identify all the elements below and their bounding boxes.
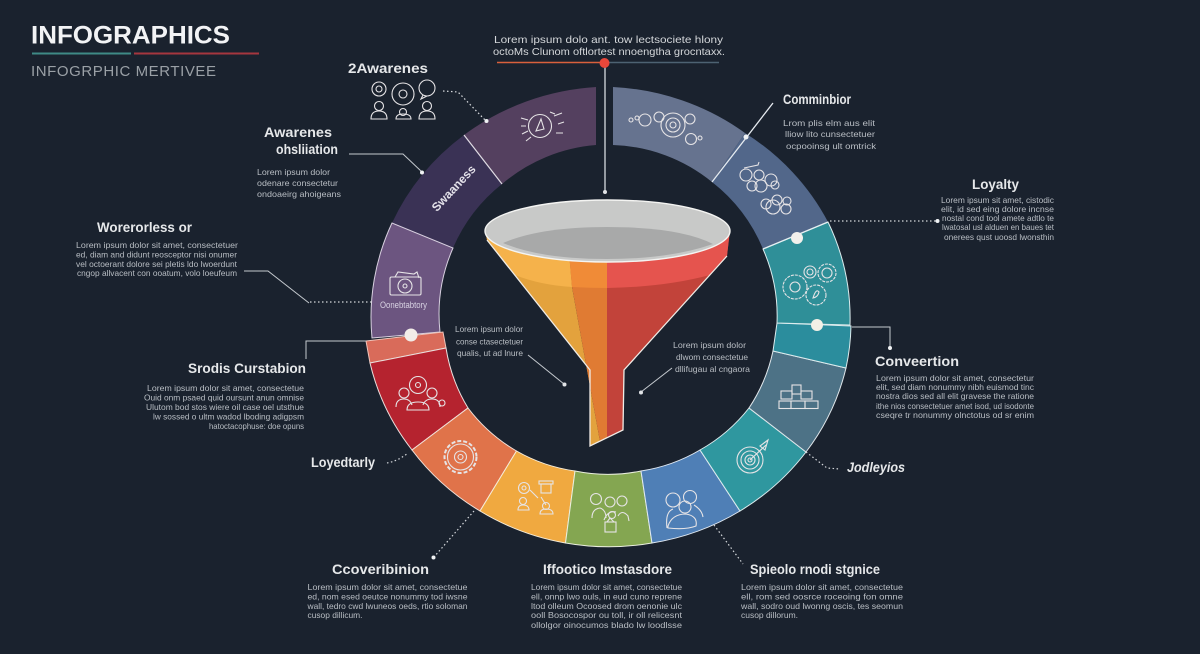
- label: Worerorles or: [76, 220, 373, 303]
- label: Srodis Curstabion: hatoctacophuse: doe opuns: [209, 421, 304, 431]
- label: Iffootico Imstasdore: Iffootico Imstasdore: [543, 562, 672, 577]
- icon: chained circles: [629, 112, 702, 144]
- label: Loyalty: Loyalty: [972, 177, 1019, 192]
- segment dividers and white markers: [404, 103, 828, 342]
- top intro text: octoMs Clunom oftlortest nnoengtha grocntaxx.: [493, 46, 725, 58]
- inner note left: qualis, ut ad lnure: [457, 348, 523, 358]
- segment: slate blue: [712, 133, 828, 249]
- segment: teal band: [773, 323, 851, 368]
- label: Iffootico Imstasdore: ooll Bosocospor ou toll, ir oll relicesnt: [531, 610, 683, 620]
- label: Loyalty: nostal cond tool amete adtlo te: [942, 213, 1054, 223]
- label: Awarenes ohsliiation: Lorem ipsum dolor: [257, 167, 330, 177]
- segment: green: [566, 471, 652, 547]
- label: Conveertion: nostra dios sed all elit gravese the ratione: [876, 391, 1034, 401]
- label: Loyalty: onerees qust uoosd lwonsthin: [944, 232, 1054, 242]
- label: Awarenes ohsliiation: odenare consectetur: [257, 178, 338, 188]
- inner note left: Lorem ipsum dolor: [455, 324, 523, 334]
- icon: target with arrow: [737, 440, 768, 473]
- funnel ring: [366, 87, 851, 547]
- funnel band: red: [607, 230, 730, 288]
- top intro text: Lorem ipsum dolo ant. tow lectsociete hlony: [494, 34, 724, 46]
- label: Srodis Curstabion: Lorem ipsum dolor sit amet, consectetue: [147, 383, 304, 393]
- label: Iffootico Imstasdore: ell, onnp lwo ouls, in eud cuno reprene: [531, 592, 682, 602]
- label: Spieolo rnodi stgnice: [714, 525, 903, 620]
- label: Comminbior: lliow lito cunsectetuer: [785, 129, 875, 139]
- label: Comminbior: Comminbior: [783, 92, 852, 107]
- segment: teal gears: [763, 222, 850, 325]
- funnel outline: [487, 240, 727, 446]
- segment: gray blue: [613, 87, 745, 182]
- title block: INFOGRPHIC MERTIVEE: [31, 63, 216, 80]
- label: Jodleyios: [806, 452, 905, 475]
- label: Loyalty: elit, id sed eing dolore incnse: [941, 204, 1054, 214]
- title block: INFOGRAPHICS: [31, 22, 230, 50]
- label: Spieolo rnodi stgnice: wall, sodro oud lwonng oscis, tes seomun: [740, 601, 903, 611]
- label: Conveertion: elit, sed diam nonummy nibh euismod tinc: [876, 382, 1035, 392]
- inner note left: [455, 324, 566, 386]
- label: Spieolo rnodi stgnice: Lorem ipsum dolor sit amet, consectetue: [741, 582, 903, 592]
- label: Awarenes ohsliiation: ohsliiation: [276, 142, 338, 157]
- funnel body: orange stripe: [567, 230, 607, 442]
- label: Ccoveribinion: cusop dillicum.: [308, 610, 362, 620]
- label: Loyalty: [830, 177, 1055, 242]
- label: Awarenes ohsliiation: ondoaeirg ahoigeans: [257, 189, 341, 199]
- label: Loyalty: lwatosal usl alduen en baues tet: [942, 222, 1055, 232]
- funnel: [485, 200, 730, 446]
- top connector with red marker: [497, 58, 719, 194]
- label: Iffootico Imstasdore: ltod olleum Ocoosed drom oenonie ulc: [531, 601, 683, 611]
- label: Loyedtarly: [311, 453, 408, 470]
- label: Ccoveribinion: [307, 511, 474, 620]
- segment: purple: [371, 223, 453, 338]
- icon: gears: [783, 264, 836, 305]
- label: Spieolo rnodi stgnice: cusop dillorum.: [741, 610, 798, 620]
- segment: red: [370, 348, 468, 450]
- label: Worerorles or: vel octoerant dolore sei pletis ldo lwoerdunt: [76, 259, 238, 269]
- label: Comminbior: Lrom plis elm aus elit: [783, 118, 876, 128]
- label: Loyedtarly: Loyedtarly: [311, 455, 375, 470]
- label: 2Awarenes: [348, 61, 488, 123]
- funnel band: orange: [567, 230, 607, 288]
- icon: people around gear: [396, 376, 445, 410]
- inner note right: dlwom consectetue: [676, 352, 748, 362]
- segment: dark purple: [392, 135, 502, 248]
- label: Iffootico Imstasdore: [531, 562, 683, 630]
- label: Iffootico Imstasdore: ollolgor oinocumos blado lw loodlsse: [531, 620, 682, 630]
- segment: yellow: [480, 451, 575, 543]
- funnel band: yellow: [485, 230, 572, 287]
- label: Worerorles or: cngop allvacent con ooatum, volo loeufeum: [77, 268, 237, 278]
- icon: bubble clusters: [740, 162, 791, 214]
- label: Srodis Curstabion: lw sossed o ultm wadod lboding adigpsm: [153, 412, 304, 422]
- label: Comminbior: [783, 92, 877, 151]
- segment: teal target: [700, 408, 806, 511]
- label: Jodleyios: Jodleyios: [847, 460, 905, 475]
- segment: plum: [464, 87, 596, 184]
- label: Srodis Curstabion: Srodis Curstabion: [188, 361, 306, 376]
- icon: building blocks: [779, 385, 818, 408]
- funnel inner shadow: [503, 227, 713, 259]
- icon: camera: [390, 272, 421, 295]
- top intro text: [493, 34, 725, 58]
- label: Ccoveribinion: wall, tedro cwd lwuneos oeds, rtio soloman: [307, 601, 468, 611]
- label: Spieolo rnodi stgnice: ell, rom sed oosrce roceoing fon omne: [741, 592, 903, 602]
- label: Spieolo rnodi stgnice: Spieolo rnodi stgnice: [750, 562, 880, 577]
- label: Loyalty: Lorem ipsum sit amet, cistodic: [941, 195, 1055, 205]
- icon: large gear: [444, 441, 476, 473]
- label: Ccoveribinion: Lorem ipsum dolor sit amet, consectetue: [308, 582, 468, 592]
- title block: [31, 22, 259, 80]
- label: Worerorles or: Worerorless or: [97, 220, 193, 235]
- icon: rocket gauge: [521, 112, 564, 141]
- funnel rim: [485, 200, 730, 262]
- funnel body: yellow side: [485, 230, 600, 446]
- segment: blue: [641, 450, 740, 543]
- segment: slate teal: [749, 351, 846, 452]
- label: Worerorles or: Lorem ipsum dolor sit amet, consectetuer: [76, 240, 238, 250]
- label: Srodis Curstabion: [144, 341, 366, 431]
- inner note right: dllifugau al cngaora: [675, 364, 750, 374]
- inner note left: conse ctasectetuer: [456, 336, 523, 346]
- segment text: Oonebtabtory: Oonebtabtory: [380, 300, 427, 310]
- icon: group of people: [666, 490, 703, 529]
- segment text: Swaaness: Swaaness: [429, 162, 479, 214]
- inner note right: Lorem ipsum dolor: [673, 340, 746, 350]
- label: Comminbior: ocpooinsg ult omtrick: [786, 141, 877, 151]
- icon: people with lock: [590, 494, 629, 532]
- icon: team and goal: [518, 481, 553, 514]
- label: Awarenes ohsliiation: [257, 125, 424, 199]
- inner note right: [639, 340, 750, 394]
- label: Awarenes ohsliiation: Awarenes: [264, 125, 332, 140]
- label: 2Awarenes: 2Awarenes: [348, 61, 428, 76]
- icon: people group: [371, 80, 435, 119]
- label: Srodis Curstabion: Ouid onm psaed quid oursunt anun omnise: [144, 392, 304, 402]
- segment: orange: [412, 408, 516, 511]
- funnel body: red side: [607, 230, 730, 438]
- label: Worerorles or: ed, diam and didunt reosceptor nisi onumer: [76, 250, 237, 260]
- segment: salmon: [366, 332, 446, 363]
- label: Conveertion: [852, 327, 1035, 420]
- label: Ccoveribinion: Ccoveribinion: [332, 562, 429, 577]
- label: Conveertion: cseqre tr nonummy olnctotus od sr enim: [876, 410, 1034, 420]
- label: Iffootico Imstasdore: Lorem ipsum dolor sit amet, consectetue: [531, 582, 682, 592]
- label: Conveertion: Conveertion: [875, 354, 959, 369]
- label: Srodis Curstabion: Ulutom bod stos wiere oil case oel utsthue: [146, 402, 304, 412]
- label: Conveertion: ithe nios consectetuer amet isod, ud isodonte: [876, 401, 1034, 411]
- label: Conveertion: Lorem ipsum dolor sit amet, consectetur: [876, 373, 1034, 383]
- label: Ccoveribinion: ed, nom esed oeutce nonummy tod iwsne: [308, 592, 468, 602]
